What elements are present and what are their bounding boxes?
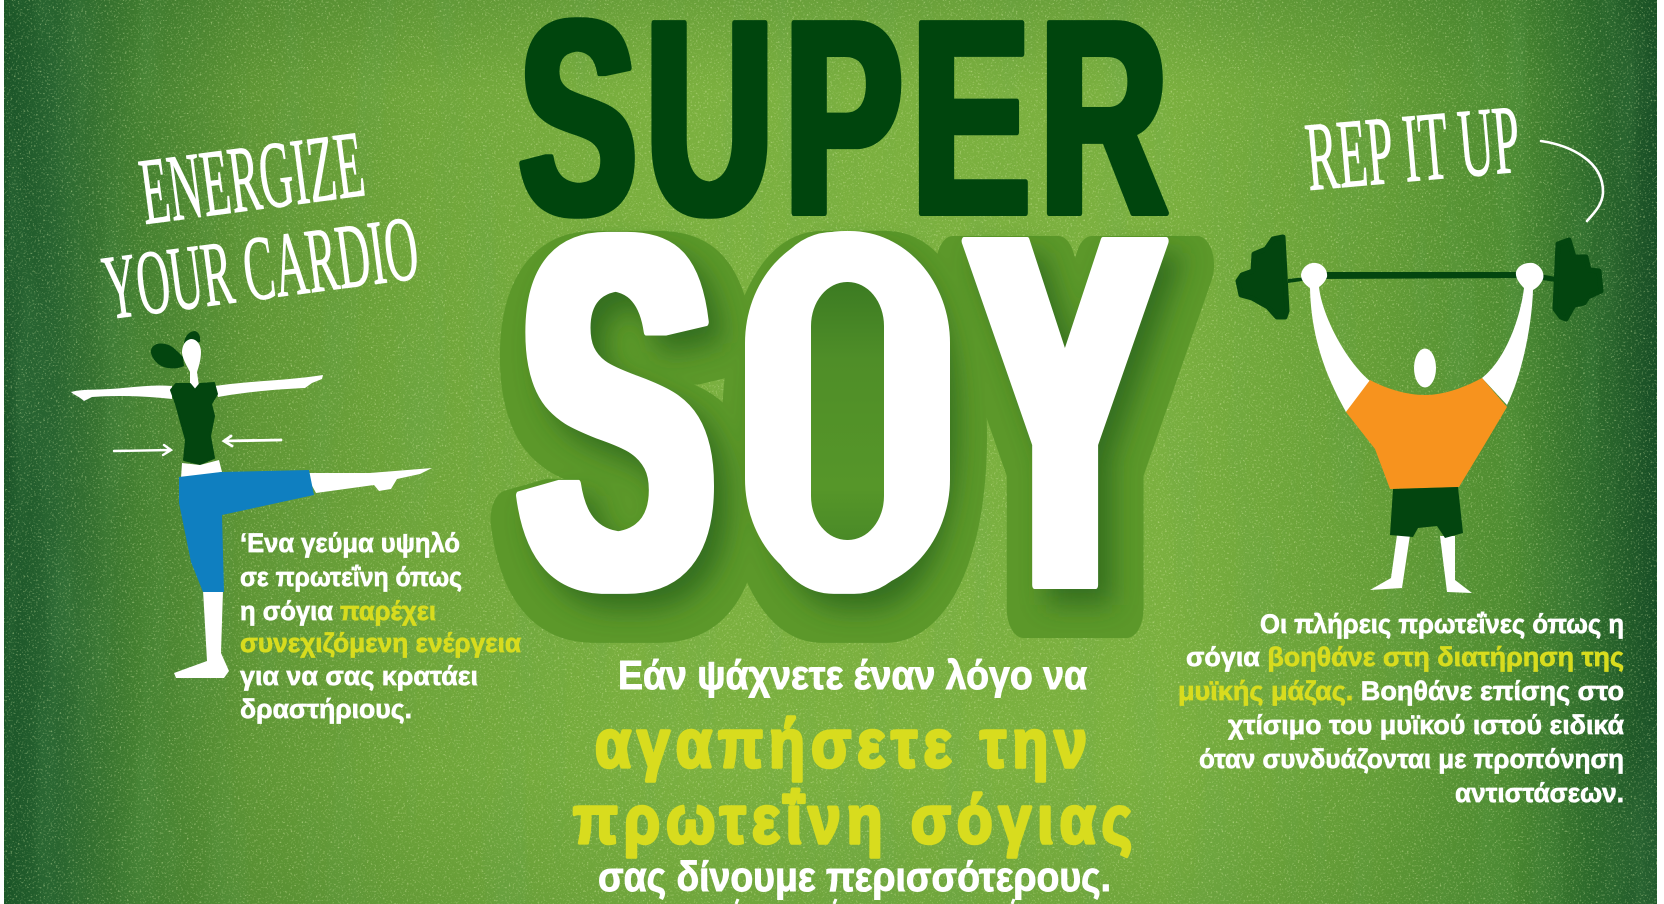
arms [71,375,323,401]
heading: energize your cardio: YOUR CARDIO [97,196,424,339]
white SOY letters: Y [969,132,1161,691]
soft dark shadow of SOY: Y [983,148,1175,707]
text block: muscle paragraph: Οι πλήρεις πρωτεΐνες όπως η [1260,609,1624,639]
text block: energy paragraph: η σόγια παρέχει [240,596,436,626]
shadow outline of SOY [530,156,1171,715]
ponytail hair [151,331,200,368]
midriff [181,460,222,478]
text block: energy paragraph: ‘Ενα γεύμα υψηλό [240,528,460,558]
shadow outline of SOY: Y [979,156,1171,715]
legs [1370,535,1472,593]
text block: muscle paragraph: όταν συνδυάζονται με προπόνηση [1199,744,1624,774]
text block: central statement: πρωτεΐνη σόγιας [573,783,1132,858]
text block: energy paragraph: συνεχιζόμενη ενέργεια [240,628,521,658]
text block: muscle paragraph: σόγια βοηθάνε στη διατήρηση της [1186,642,1624,672]
title: SOY with green shadow [520,132,1175,715]
white SOY letters: O [747,132,942,691]
O body backing [745,231,950,591]
shadow outline of SOY: O [757,156,952,715]
text block: muscle paragraph: χτίσιμο του μυϊκού ιστού ειδικά [1228,710,1624,740]
O inner counter [811,282,884,540]
soft dark shadow of SOY: O [761,148,956,707]
heading: energize your cardio: ENERGIZE [134,110,370,245]
arrow: curved chalk arrow [1541,141,1603,221]
arms and hands [1301,263,1543,412]
raised leg [305,468,432,493]
head [1414,348,1436,388]
text block: muscle paragraph: αντιστάσεων. [1455,778,1624,808]
white SOY letters: S [520,132,713,691]
text block: muscle paragraph: μυϊκής μάζας. Βοηθάνε επίσης στο [1178,676,1624,706]
right plate [1555,240,1601,319]
left plate [1238,237,1287,317]
icon: weightlifter figure [1238,237,1601,593]
dark shorts [1390,487,1463,538]
white SOY letters [520,132,1161,691]
icon: woman balancing figure [71,331,432,678]
heading: energize your cardio [97,110,424,339]
soft dark shadow of SOY: S [534,148,727,707]
soft dark shadow of SOY [534,148,1175,707]
blue trousers [179,470,314,592]
text block: energy paragraph: σε πρωτεΐνη όπως [240,562,462,592]
text block: energy paragraph: για να σας κρατάει [240,661,478,691]
shadow outline of SOY: S [530,156,723,715]
text block: energy paragraph [240,528,521,724]
arrows [114,436,281,455]
text block: central statement [573,652,1132,900]
orange shirt [1346,378,1507,489]
barbell [1288,272,1556,283]
dark top [171,383,217,464]
text block: central statement: αγαπήσετε την [595,707,1087,782]
text block: energy paragraph: δραστήριους. [240,694,412,724]
face and neck [182,339,201,392]
text block: muscle paragraph [1178,609,1624,808]
text block: central statement: Εάν ψάχνετε έναν λόγο να [618,652,1087,698]
standing leg [174,590,229,678]
text block: central statement: σας δίνουμε περισσότερους. [598,853,1111,900]
